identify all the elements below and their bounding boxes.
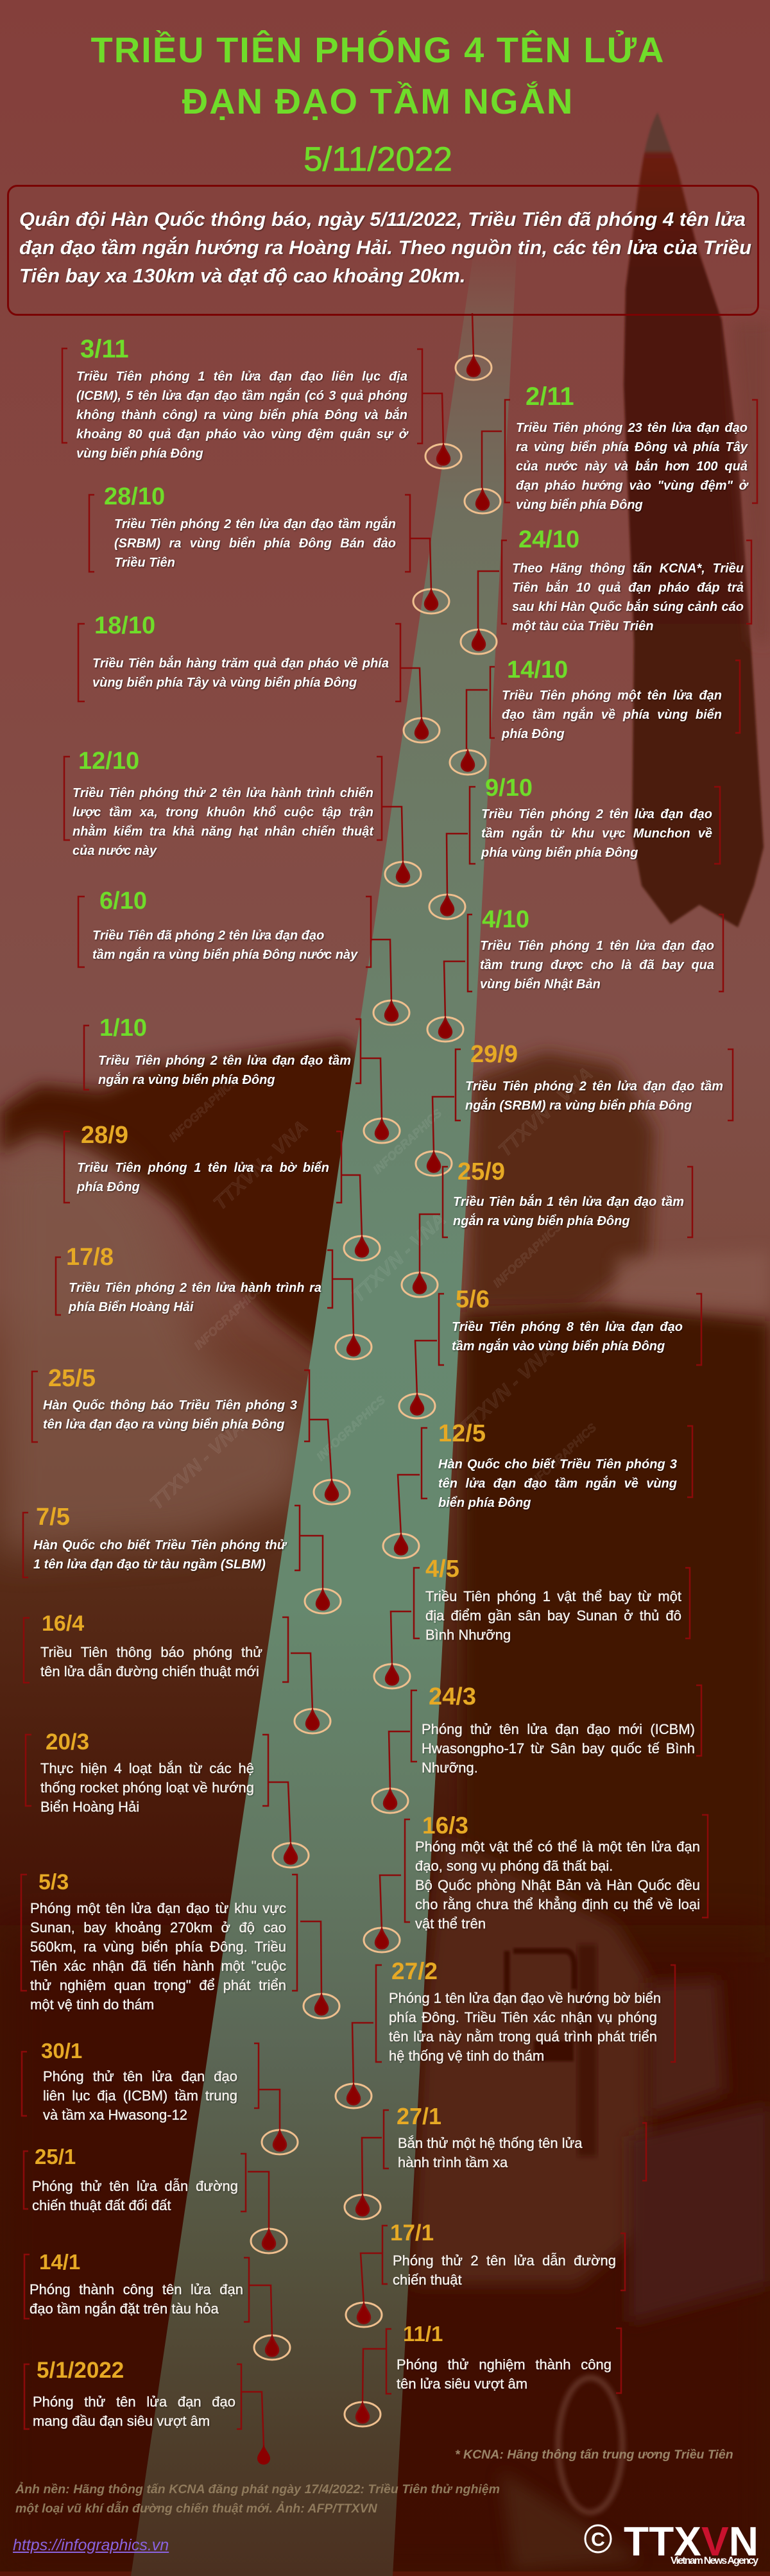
connector and pin: 25/1 <box>24 2151 287 2253</box>
connector and pin: 24/3 <box>372 1685 701 1813</box>
entry: 25/5: Hàn Quốc thông báo Triều Tiên phóng 3 <box>43 1398 297 1413</box>
entry: 24/10: Theo Hãng thông tấn KCNA*, Triều <box>512 562 744 576</box>
entry: 14/1 <box>30 2251 243 2319</box>
entry: 14/10: phía Đông <box>502 727 565 741</box>
entry: 5/3: 560km, ra vùng biển phía Đông. Triều <box>30 1939 286 1955</box>
entry: 12/5: biển phía Đông <box>438 1496 531 1510</box>
entry: 16/3 <box>415 1812 701 1932</box>
entry: 27/1: hành trình tầm xa <box>398 2154 508 2170</box>
entry: 12/10: lược tầm xa, trong khuôn khổ cuộc tập trận <box>73 805 373 820</box>
entry: 29/9 <box>465 1041 724 1113</box>
entry: 30/1: liên lục địa (ICBM) tầm trung <box>43 2088 237 2104</box>
watermarks: INFOGRAPHICS <box>491 1220 564 1290</box>
entry: 20/3: Biển Hoàng Hải <box>40 1799 139 1815</box>
entry: 17/8: 17/8 <box>66 1244 114 1271</box>
entry: 12/5 <box>438 1420 678 1511</box>
entry: 25/5: 25/5 <box>48 1365 96 1392</box>
entry: 24/10: Tiên bắn 10 quả đạn pháo đáp trả <box>512 581 744 595</box>
entry: 9/10: phía vùng biển phía Đông <box>481 846 638 860</box>
entry: 14/1: đạo tầm ngắn đặt trên tàu hỏa <box>30 2301 219 2317</box>
connector and pin: 17/8 <box>56 1250 372 1359</box>
entry: 30/1: Phóng thử tên lửa đạn đạo <box>43 2068 237 2084</box>
entry: 4/5 <box>425 1556 682 1644</box>
watermarks: TTXVN - VNA <box>146 1416 249 1514</box>
entry: 17/1: Phóng thử 2 tên lửa dẫn đường <box>393 2253 616 2269</box>
watermarks: TTXVN - VNA <box>494 1063 597 1161</box>
entry: 4/10 <box>480 906 715 992</box>
connector and pin: 16/3 <box>364 1815 708 1952</box>
entry: 17/1: chiến thuật <box>393 2272 462 2288</box>
entry: 11/1: 11/1 <box>403 2322 443 2346</box>
entry: 27/2: phía Đông. Triều Tiên xác nhận vụ phóng <box>389 2009 657 2025</box>
entry: 27/2 <box>389 1959 657 2066</box>
entry: 12/10 <box>73 748 375 859</box>
intro text <box>19 208 752 288</box>
connector and pin: 5/6 <box>399 1294 701 1418</box>
entry: 5/6: tầm ngắn vào vùng biển phía Đông <box>452 1339 665 1353</box>
entry: 28/10: 28/10 <box>104 483 165 510</box>
entry: 25/1: chiến thuật đất đối đất <box>32 2197 171 2213</box>
entry: 4/10: Triều Tiên phóng 1 tên lửa đạn đạo <box>480 939 714 953</box>
entry: 3/11: khoảng 80 quả đạn pháo vào vùng đệm quân sự ở <box>76 427 407 442</box>
connector and pin: start from intro <box>456 313 492 380</box>
entry: 3/11: vùng biển phía Đông <box>76 447 203 461</box>
entry: 17/8: Triều Tiên phóng 2 tên lửa hành trình ra <box>69 1281 321 1295</box>
entry: 16/3: vật thể trên <box>415 1916 486 1932</box>
entry: 14/10: 14/10 <box>507 657 568 683</box>
footnote: KCNA: * KCNA: Hãng thông tấn trung ương Triều Tiên <box>455 2448 733 2462</box>
entry: 11/1 <box>397 2323 612 2394</box>
entry: 17/1: 17/1 <box>390 2220 434 2245</box>
entry: 20/3: thống rocket phóng loạt về hướng <box>40 1780 254 1796</box>
connector and pin: 14/1 <box>24 2254 290 2360</box>
intro panel <box>7 185 759 316</box>
connector and pin: 6/10 <box>78 897 409 1025</box>
entry: 14/1: Phóng thành công tên lửa đạn <box>30 2281 243 2297</box>
title line 2: ĐẠN ĐẠO TẦM NGẮN <box>182 81 574 121</box>
entry: 4/5: 4/5 <box>425 1556 459 1583</box>
logo: TTXVN: Vietnam News Agency <box>671 2555 758 2566</box>
entry: 25/9: 25/9 <box>458 1158 505 1185</box>
connector and pin: 14/10 <box>450 660 740 775</box>
entry: 5/1/2022: Phóng thử tên lửa đạn đạo <box>33 2394 235 2410</box>
entry: 29/9: Triều Tiên phóng 2 tên lửa đạn đạo tầm <box>465 1079 723 1094</box>
entry: 24/3 <box>422 1683 696 1776</box>
connector and pin: 28/10 <box>89 495 449 614</box>
entry: 6/10: 6/10 <box>99 888 147 914</box>
entry: 30/1: 30/1 <box>41 2039 82 2063</box>
entry: 4/5: địa điểm gần sân bay Sunan ở thủ đô <box>425 1608 681 1624</box>
entry: 3/11: (ICBM), 5 tên lửa đạn đạo tầm ngắn (có 3 quả phóng <box>76 389 407 403</box>
entry: 7/5 <box>33 1504 289 1572</box>
intro text: Tiên bay xa 130km và đạt độ cao khoảng 20km. <box>19 264 466 287</box>
entry: 18/10: 18/10 <box>94 612 155 639</box>
title: TRIỀU TIÊN PHÓNG 4 TÊN LỬA <box>91 30 665 70</box>
entry: 9/10: tầm ngắn từ khu vực Munchon về <box>481 827 712 841</box>
entry: 28/9: phía Đông <box>77 1180 140 1194</box>
connector and pin: 5/1/2022 <box>24 2364 270 2464</box>
connector and pin: 9/10 <box>429 787 720 919</box>
entry: 24/3: 24/3 <box>429 1683 476 1710</box>
connector and pin: 12/10 <box>64 757 421 886</box>
entry: 12/5: Hàn Quốc cho biết Triều Tiên phóng 3 <box>438 1457 677 1472</box>
watermarks: TTXVN - VNA <box>347 1209 450 1307</box>
entry: 5/1/2022: mang đầu đạn siêu vượt âm <box>33 2413 210 2429</box>
entry: 5/3: 5/3 <box>38 1870 69 1894</box>
entry: 16/3: 16/3 <box>422 1812 468 1839</box>
entry: 3/11 <box>76 335 410 461</box>
entry: 9/10 <box>481 775 713 861</box>
entry: 28/10 <box>104 483 397 570</box>
entry: 14/1: 14/1 <box>39 2250 80 2274</box>
entry: 3/11: không thành công) ra vùng biển phía Đông và bắn <box>76 408 407 422</box>
entry: 16/4: Triều Tiên thông báo phóng thử <box>40 1644 262 1660</box>
entry: 27/2: 27/2 <box>391 1958 438 1984</box>
entry: 16/4: tên lửa dẫn đường chiến thuật mới <box>40 1663 259 1679</box>
entry: 24/3: Phóng thử tên lửa đạn đạo mới (ICBM) <box>422 1721 695 1737</box>
entry: 20/3 <box>40 1730 255 1816</box>
logo: TTXVN <box>583 2522 762 2568</box>
entry: 24/10: sau khi Hàn Quốc bắn súng cảnh cáo <box>512 600 744 614</box>
entry: 25/1 <box>32 2146 238 2215</box>
entry: 5/3: một vệ tinh do thám <box>30 1996 154 2013</box>
entry: 5/3: Phóng một tên lửa đạn đạo từ khu vực <box>30 1900 286 1916</box>
connector and pin: 3/11 <box>62 348 461 468</box>
entry: 27/1 <box>397 2105 582 2172</box>
connector and pin: 7/5 <box>23 1506 341 1613</box>
watermarks: TTXVN - VNA <box>209 1117 312 1214</box>
watermarks: INFOGRAPHICS <box>526 1421 599 1491</box>
connector and pin: 4/5 <box>374 1568 690 1688</box>
entry: 3/11: 3/11 <box>80 335 129 363</box>
entry: 24/10: 24/10 <box>518 526 579 553</box>
watermarks: INFOGRAPHICS <box>314 1393 388 1463</box>
logo: TTXVN: C <box>591 2529 605 2550</box>
entry: 12/10: nhằm kiểm tra khả năng hạt nhân chiến thuật <box>73 825 373 839</box>
entry: 17/1 <box>390 2222 616 2290</box>
entry: 30/1 <box>41 2040 237 2125</box>
entry: 29/9: 29/9 <box>470 1041 518 1068</box>
intro text: Quân đội Hàn Quốc thông báo, ngày 5/11/2022, Triều Tiên đã phóng 4 tên lửa <box>19 208 746 230</box>
connector and pin: 16/4 <box>24 1617 330 1733</box>
connector and pin: 30/1 <box>22 2043 298 2154</box>
entry: 24/10 <box>512 526 744 633</box>
watermarks: INFOGRAPHICS <box>371 1106 444 1176</box>
entry: 24/3: Hwasongpho-17 từ Sân bay quốc tế Bình <box>422 1740 695 1756</box>
connector and pin: 29/9 <box>416 1049 733 1176</box>
entry: 28/10: Triều Tiên <box>114 556 175 570</box>
entry: 7/5: 1 tên lửa đạn đạo từ tàu ngầm (SLBM) <box>33 1558 266 1572</box>
entry: 1/10: ngắn ra vùng biển phía Đông <box>98 1073 275 1087</box>
entry: 16/3: Bộ Quốc phòng Nhật Bản và Hàn Quốc đều <box>415 1877 700 1893</box>
entry: 7/5: Hàn Quốc cho biết Triều Tiên phóng thử <box>33 1538 286 1552</box>
connector and pin: 2/11 <box>465 400 757 513</box>
entry: 16/3: cho rằng chưa thể khẳng định cụ thể về loại <box>415 1896 700 1912</box>
entry: 27/1: 27/1 <box>397 2103 441 2129</box>
entry: 12/5: tên lửa đạn đạo tầm ngắn về vùng <box>438 1477 677 1491</box>
entry: 25/9: Triều Tiên bắn 1 tên lửa đạn đạo tầm <box>453 1195 684 1209</box>
entry: 2/11: của nước này và bắn hơn 100 quả <box>516 459 748 474</box>
intro text: đạn đạo tầm ngắn hướng ra Hoàng Hải. Theo nguồn tin, các tên lửa của Triều <box>19 236 751 259</box>
entry: 28/10: (SRBM) ra vùng biển phía Đông Bán đảo <box>114 537 396 551</box>
entry: 4/10: tầm trung được cho là đã bay qua <box>480 958 714 972</box>
entry: 5/3: Sunan, bay khoảng 270km ở độ cao <box>30 1919 286 1936</box>
entry: 2/11: vùng biển phía Đông <box>516 498 643 512</box>
connector and pin: 27/2 <box>336 1965 675 2108</box>
connector and pin: 11/1 <box>345 2328 621 2426</box>
entry: 28/10: Triều Tiên phóng 2 tên lửa đạn đạo tầm ngắn <box>114 517 396 531</box>
entry: 12/10: của nước này <box>73 844 157 858</box>
entry: 5/3: Tiên xác nhận đã tiến hành một "cuộc <box>30 1958 286 1974</box>
connector and pin: 1/10 <box>84 1019 400 1143</box>
connector and pin: 25/9 <box>402 1167 692 1297</box>
entry: 14/10: đạo tầm ngắn về phía vùng biển <box>502 708 722 722</box>
connector and pin: 5/3 <box>21 1875 339 2018</box>
watermarks: INFOGRAPHICS <box>167 1074 240 1144</box>
entry: 24/10: một tàu của Triều Triên <box>512 619 653 633</box>
connector and pin: 18/10 <box>78 624 440 743</box>
connector and pin: 28/9 <box>64 1131 380 1260</box>
photo caption: một loại vũ khí dẫn đường chiến thuật mới. Ảnh: AFP/TTXVN <box>15 2502 377 2516</box>
entry: 20/3: Thực hiện 4 loạt bắn từ các hệ <box>40 1760 254 1776</box>
connector and pin: 17/1 <box>346 2226 625 2327</box>
entry: 2/11 <box>516 382 749 513</box>
entry: 17/8: phía Biển Hoàng Hải <box>69 1300 193 1314</box>
photo caption <box>15 2480 500 2518</box>
entry: 5/6: Triều Tiên phóng 8 tên lửa đạn đạo <box>452 1320 683 1334</box>
entry: 29/9: ngắn (SRBM) ra vùng biển phía Đông <box>465 1099 692 1113</box>
entry: 6/10: tầm ngắn ra vùng biển phía Đông nước này <box>92 948 357 962</box>
entry: 2/11: đạn pháo hướng vào "vùng đệm" ở <box>516 479 748 493</box>
entry: 1/10: 1/10 <box>99 1015 147 1042</box>
entry: 25/9 <box>453 1158 685 1230</box>
entry: 9/10: Triều Tiên phóng 2 tên lửa đạn đạo <box>481 807 712 821</box>
photo caption: Ảnh nền: Hãng thông tấn KCNA đăng phát ngày 17/4/2022: Triều Tiên thử nghiệm <box>15 2482 500 2496</box>
entry: 16/3: đạo, song vụ phóng đã thất bại. <box>415 1858 613 1874</box>
entry: 27/1: Bắn thử một hệ thống tên lửa <box>398 2135 583 2151</box>
entry: 5/6: 5/6 <box>456 1286 490 1313</box>
entry: 6/10 <box>92 888 359 963</box>
entry: 4/10: 4/10 <box>482 906 529 933</box>
entry: 2/11: 2/11 <box>526 382 574 411</box>
entry: 18/10: Triều Tiên bắn hàng trăm quả đạn pháo về phía <box>92 657 389 671</box>
entry: 5/6 <box>452 1286 683 1354</box>
website link: https://infographics.vn <box>13 2536 169 2554</box>
entry: 3/11: Triều Tiên phóng 1 tên lửa đạn đạo liên lục địa <box>76 370 407 384</box>
watermarks: TTXVN - VNA <box>455 1341 558 1439</box>
entry: 30/1: và tầm xa Hwasong-12 <box>43 2107 187 2123</box>
connector and pin: 4/10 <box>427 914 723 1042</box>
entry: 5/1/2022 <box>33 2359 235 2431</box>
entry: 4/5: Bình Nhưỡng <box>425 1627 511 1643</box>
entry: 2/11: Triều Tiên phóng 23 tên lửa đạn đạo <box>516 421 748 435</box>
entry: 12/10: 12/10 <box>78 748 139 775</box>
entry: 4/10: vùng biển Nhật Bản <box>480 977 601 992</box>
entry: 27/2: tên lửa này nằm trong quá trình phát triển <box>389 2029 657 2045</box>
entry: 25/1: 25/1 <box>35 2145 76 2168</box>
watermarks: INFOGRAPHICS <box>192 1282 265 1352</box>
connector and pin: 12/5 <box>383 1426 692 1558</box>
entry: 5/3 <box>30 1870 287 2013</box>
entry: 5/1/2022: 5/1/2022 <box>37 2358 124 2383</box>
entry: 28/9: 28/9 <box>81 1122 128 1149</box>
entry: 20/3: 20/3 <box>46 1730 89 1755</box>
entry: 16/3: Phóng một vật thể có thể là một tên lửa đạn <box>415 1839 700 1855</box>
entry: 27/2: hệ thống vệ tinh do thám <box>389 2048 544 2064</box>
connector and pin: 24/10 <box>461 540 751 654</box>
connector and pin: 20/3 <box>26 1735 309 1868</box>
entry: 7/5: 7/5 <box>36 1504 70 1531</box>
entry: 18/10 <box>92 612 390 691</box>
entry: 12/10: Triều Tiên phóng thử 2 tên lửa hành trình chiến <box>73 786 373 800</box>
entry: 14/10: Triều Tiên phóng một tên lửa đạn <box>502 689 722 703</box>
entry: 1/10 <box>98 1015 352 1088</box>
entry: 12/5: 12/5 <box>438 1420 486 1447</box>
entry: 27/2: Phóng 1 tên lửa đạn đạo về hướng bờ biển <box>389 1990 661 2006</box>
entry: 14/10 <box>502 657 723 742</box>
connector and pin: 27/1 <box>345 2110 646 2219</box>
entry: 16/4 <box>40 1611 263 1680</box>
entry: 16/4: 16/4 <box>42 1611 84 1636</box>
entry: 11/1: Phóng thử nghiệm thành công <box>397 2357 612 2373</box>
connector and pin: 25/5 <box>32 1370 350 1504</box>
date heading: 5/11/2022 <box>304 141 452 178</box>
entry: 28/9 <box>77 1122 330 1195</box>
entry: 5/3: thử nghiệm quan trọng" để phát triển <box>30 1977 286 1993</box>
entry: 28/9: Triều Tiên phóng 1 tên lửa ra bờ biển <box>77 1161 329 1175</box>
entry: 4/5: Triều Tiên phóng 1 vật thể bay từ một <box>425 1588 681 1604</box>
entry: 18/10: vùng biển phía Tây và vùng biển phía Đông <box>92 676 357 690</box>
entry: 25/5: tên lửa đạn đạo ra vùng biển phía Đông <box>43 1418 285 1432</box>
entry: 24/3: Nhưỡng. <box>422 1760 478 1776</box>
entry: 11/1: tên lửa siêu vượt âm <box>397 2376 527 2392</box>
entry: 25/9: ngắn ra vùng biển phía Đông <box>453 1214 630 1228</box>
entry: 9/10: 9/10 <box>485 775 533 802</box>
entry: 25/1: Phóng thử tên lửa dẫn đường <box>32 2178 238 2194</box>
entry: 25/5 <box>43 1365 298 1432</box>
entry: 2/11: ra vùng biển phía Đông và phía Tây <box>516 440 748 454</box>
entry: 6/10: Triều Tiên đã phóng 2 tên lửa đạn đạo <box>92 929 324 943</box>
entry: 17/8 <box>66 1244 322 1315</box>
entry: 1/10: Triều Tiên phóng 2 tên lửa đạn đạo tầm <box>98 1054 351 1068</box>
